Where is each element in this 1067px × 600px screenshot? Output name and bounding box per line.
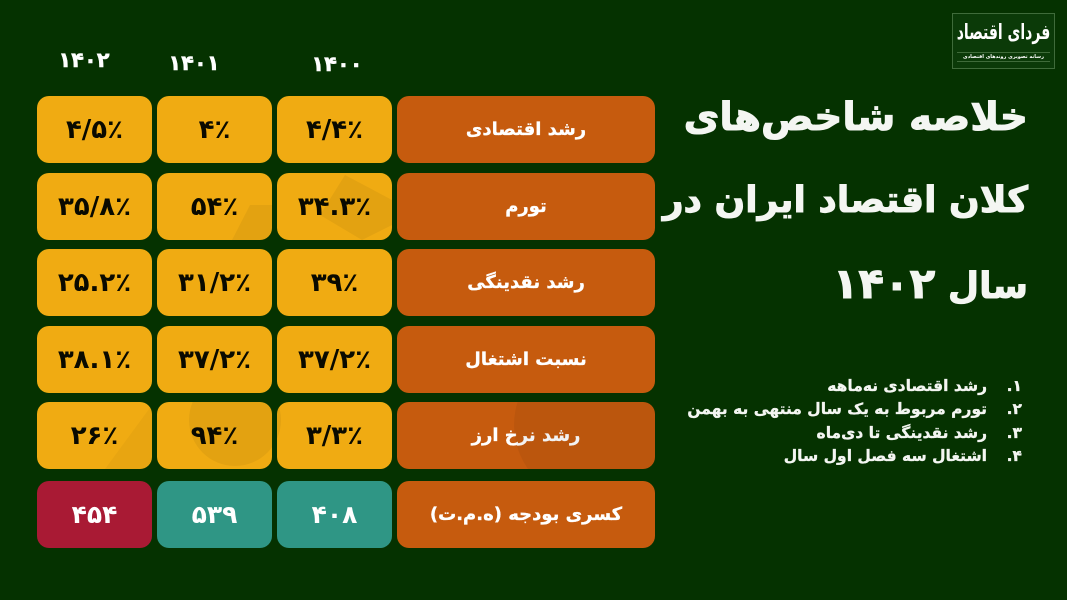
table row: inflation (37, 173, 655, 240)
table row: liquidity growth (37, 249, 655, 316)
year header: 1400: ۱۴۰۰ (311, 52, 363, 76)
table row: liquidity growth: ۳۹٪ (311, 268, 358, 298)
text: ۲. (1007, 400, 1022, 418)
table row: exchange rate growth (37, 402, 655, 469)
table row: inflation: ۳۵/۸٪ (58, 192, 131, 222)
table row: economic growth (37, 96, 655, 163)
table row: liquidity growth: ۲۵.۲٪ (58, 268, 131, 298)
logo (952, 13, 1055, 69)
logo tagline (957, 52, 1050, 62)
title (660, 95, 1029, 308)
table row: budget deficit: کسری بودجه (ه.م.ت) (430, 504, 622, 525)
table row: inflation: تورم (505, 196, 547, 217)
table row: inflation: ۵۴٪ (191, 192, 238, 222)
logo name: فردای اقتصاد (957, 21, 1050, 45)
table row: budget deficit: ۵۳۹ (192, 500, 237, 529)
table row: budget deficit: ۴۵۴ (72, 500, 117, 529)
title: سال ۱۴۰۲ (833, 259, 1028, 308)
table row: liquidity growth: رشد نقدینگی (467, 272, 585, 293)
footnotes: رشد نقدینگی تا دی‌ماه (817, 424, 987, 442)
table row: exchange rate growth: ۲۶٪ (71, 420, 118, 450)
footnotes (687, 377, 1022, 465)
table row: exchange rate growth: رشد نرخ ارز (472, 425, 580, 446)
logo tagline: رسانه تصویری روندهای اقتصادی (963, 54, 1044, 60)
year header: 1402: ۱۴۰۲ (58, 48, 110, 72)
table row: budget deficit: ۴۰۸ (312, 500, 357, 529)
table row: inflation: ۳۴.۳٪ (298, 192, 371, 222)
table row: employment ratio: ۳۷/۲٪ (298, 344, 371, 374)
table row: economic growth: ۴٪ (199, 114, 230, 144)
footnotes: تورم مربوط به یک سال منتهی به بهمن (687, 400, 987, 418)
text: ۱. (1007, 377, 1022, 395)
title: کلان اقتصاد ایران در (663, 180, 1028, 221)
table row: budget deficit (37, 481, 655, 548)
table row: exchange rate growth: ۹۴٪ (191, 420, 238, 450)
footnotes: اشتغال سه فصل اول سال (784, 447, 987, 465)
watermark shapes (189, 175, 655, 469)
table row: exchange rate growth: ۳/۳٪ (306, 420, 363, 450)
table row: liquidity growth: ۳۱/۲٪ (178, 268, 251, 298)
text: ۳. (1007, 424, 1022, 442)
title: خلاصه شاخص‌های (684, 95, 1028, 140)
table row: economic growth: ۴/۴٪ (306, 114, 363, 144)
text: ۴. (1007, 447, 1022, 465)
table row: employment ratio (37, 326, 655, 393)
footnotes: رشد اقتصادی نه‌ماهه (827, 377, 987, 395)
table row: employment ratio: نسبت اشتغال (465, 349, 587, 370)
table row: employment ratio: ۳۷/۲٪ (178, 344, 251, 374)
table row: economic growth: رشد اقتصادی (466, 119, 586, 140)
table row: employment ratio: ۳۸.۱٪ (58, 344, 131, 374)
table row: economic growth: ۴/۵٪ (66, 114, 123, 144)
year header: 1401: ۱۴۰۱ (168, 51, 220, 75)
